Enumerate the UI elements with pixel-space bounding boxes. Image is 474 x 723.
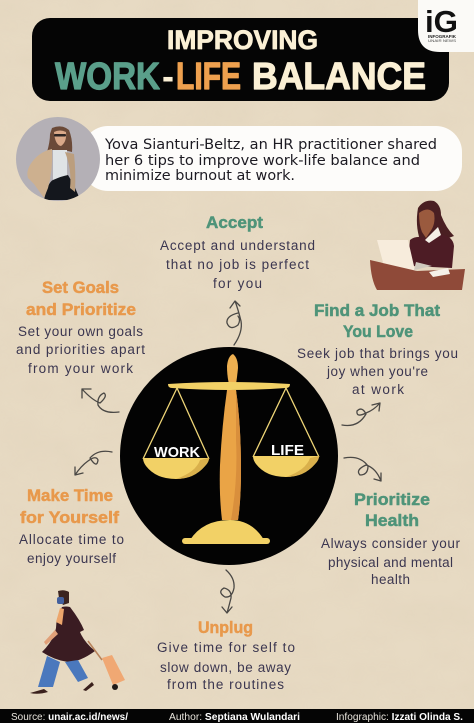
tip: prioritize health bbox=[321, 490, 460, 587]
logo: iG Infografik: INFOGRAFIK bbox=[428, 34, 457, 39]
title line: work-life balance: - bbox=[162, 56, 174, 98]
scale stand bbox=[168, 354, 290, 544]
intro text: minimize burnout at work. bbox=[105, 168, 295, 184]
footer bar: Author: Septiana Wulandari bbox=[169, 712, 300, 723]
tip: prioritize health: Prioritize bbox=[354, 490, 430, 509]
tip: accept: for you bbox=[213, 276, 262, 291]
logo: iG Infografik: iG bbox=[425, 4, 458, 39]
tip: set goals and prioritize: and priorities apart bbox=[16, 342, 145, 357]
tip: unplug: from the routines bbox=[167, 677, 284, 692]
tip: find a job that you love: Seek job that brings you bbox=[297, 346, 458, 361]
illustration: woman at laptop bbox=[370, 201, 465, 290]
tip: find a job that you love bbox=[297, 301, 458, 397]
title line: work-life balance: LIFE bbox=[176, 56, 241, 98]
tip: accept: Accept bbox=[206, 213, 263, 232]
tip: set goals and prioritize: Set your own goals bbox=[18, 324, 143, 339]
title line: work-life balance bbox=[55, 56, 426, 98]
tip: unplug bbox=[157, 618, 295, 692]
footer bar: Infographic: Izzati Olinda S. bbox=[336, 712, 463, 723]
tip: prioritize health: Always consider your bbox=[321, 536, 460, 551]
intro speech bubble bbox=[82, 126, 462, 191]
tip: make time for yourself bbox=[19, 486, 124, 566]
tip: find a job that you love: at work bbox=[352, 382, 404, 397]
tip: make time for yourself: Allocate time to bbox=[19, 532, 124, 547]
tip: find a job that you love: You Love bbox=[343, 322, 413, 341]
intro text bbox=[104, 137, 437, 184]
tip: find a job that you love: Find a Job That bbox=[314, 301, 440, 320]
tip: unplug: slow down, be away bbox=[160, 660, 291, 675]
intro text: her 6 tips to improve work-life balance and bbox=[105, 153, 420, 169]
right pan: life: LIFE bbox=[271, 442, 304, 459]
logo: iG Infografik bbox=[418, 0, 474, 52]
tip: accept bbox=[160, 213, 315, 291]
arrow: to make time bbox=[75, 451, 112, 475]
tip: make time for yourself: for Yourself bbox=[20, 508, 119, 527]
tip: prioritize health: physical and mental bbox=[328, 555, 453, 570]
tip: make time for yourself: Make Time bbox=[27, 486, 113, 505]
left pan: work: WORK bbox=[154, 444, 200, 461]
balance scale circle bbox=[120, 347, 338, 565]
title banner bbox=[32, 18, 449, 101]
tip: make time for yourself: enjoy yourself bbox=[27, 551, 116, 566]
arrow: to find a job bbox=[342, 403, 380, 426]
title line: work-life balance: WORK bbox=[55, 56, 160, 98]
logo: iG Infografik: UNAIR NEWS bbox=[428, 39, 457, 43]
title line: work-life balance: BALANCE bbox=[252, 56, 426, 98]
illustration: man with suitcase bbox=[30, 590, 125, 694]
footer bar bbox=[0, 709, 474, 723]
tip: unplug: Unplug bbox=[198, 618, 253, 637]
tip: unplug: Give time for self to bbox=[157, 640, 295, 655]
arrow: to set goals bbox=[82, 389, 119, 412]
tip: set goals and prioritize: Set Goals bbox=[42, 278, 119, 297]
intro text: Yova Sianturi-Beltz, an HR practitioner shared bbox=[104, 137, 437, 153]
tip: accept: Accept and understand bbox=[160, 238, 315, 253]
tip: find a job that you love: joy when you're bbox=[326, 364, 428, 379]
left pan: work bbox=[143, 388, 209, 479]
tip: accept: that no job is perfect bbox=[166, 257, 309, 272]
tip: set goals and prioritize bbox=[16, 278, 145, 376]
tip: prioritize health: Health bbox=[365, 511, 419, 530]
arrow: to prioritize health bbox=[344, 457, 381, 481]
arrow: to accept bbox=[227, 301, 241, 345]
tip: set goals and prioritize: from your work bbox=[28, 361, 133, 376]
right pan: life bbox=[253, 388, 319, 477]
title line: improving: IMPROVING bbox=[167, 25, 318, 55]
portrait of Yova bbox=[16, 117, 100, 201]
arrow: to unplug bbox=[221, 570, 234, 613]
tip: prioritize health: health bbox=[371, 572, 410, 587]
tip: set goals and prioritize: and Prioritize bbox=[26, 300, 136, 319]
footer bar: Source: unair.ac.id/news/ bbox=[11, 712, 128, 723]
